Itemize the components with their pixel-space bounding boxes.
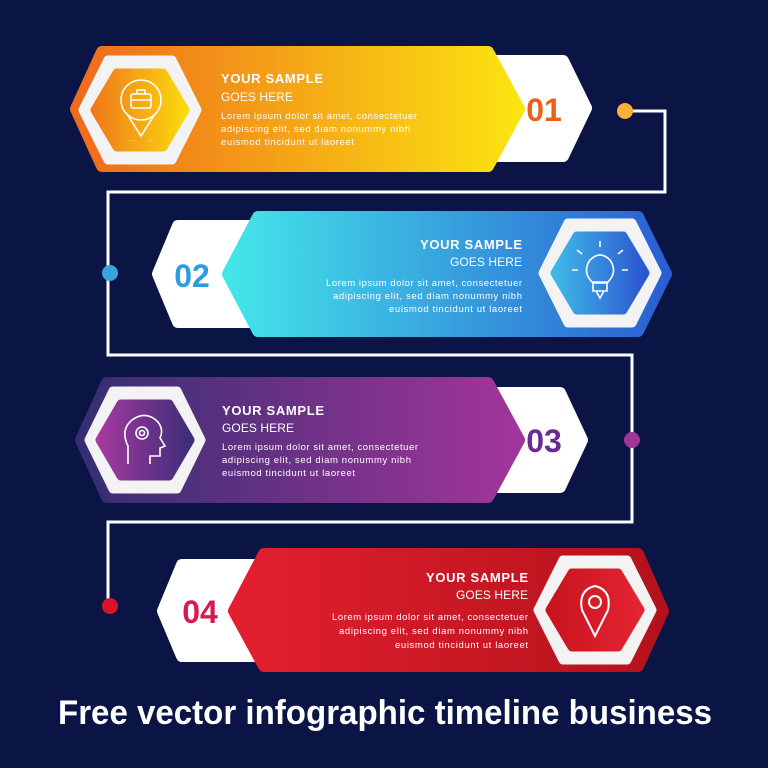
icon: location pin <box>538 560 652 660</box>
text block 02: Lorem ipsum dolor sit amet, consectetuer <box>326 278 522 289</box>
number tag 04 <box>163 565 272 656</box>
text block 02: GOES HERE <box>450 255 522 269</box>
icon: briefcase pin <box>83 60 197 160</box>
text block 01: GOES HERE <box>221 90 293 104</box>
text block 04: Lorem ipsum dolor sit amet, consectetuer <box>332 612 528 623</box>
panel: step 04 <box>163 554 663 666</box>
text block 04: YOUR SAMPLE <box>426 570 528 585</box>
text block 03: GOES HERE <box>222 421 294 435</box>
text block 04: euismod tincidunt ut laoreet <box>395 640 528 651</box>
panel: step 03 <box>81 383 582 497</box>
dot: 04 <box>102 598 118 614</box>
text block 04 <box>332 570 528 651</box>
text block 01 <box>221 71 417 148</box>
text block 03 <box>222 403 418 479</box>
number tag 03: 03 <box>526 423 562 459</box>
text block 02: euismod tincidunt ut laoreet <box>389 304 522 315</box>
number tag 01: 01 <box>526 92 562 128</box>
caption: Free vector infographic timeline business <box>58 694 712 732</box>
text block 04: adipiscing elit, sed diam nonummy nibh <box>339 626 528 637</box>
text block 04: GOES HERE <box>456 588 528 602</box>
text block 02: YOUR SAMPLE <box>420 237 522 252</box>
icon: light bulb <box>543 223 657 323</box>
number tag 02: 02 <box>174 258 210 294</box>
text block 01: YOUR SAMPLE <box>221 71 323 86</box>
text block 02: adipiscing elit, sed diam nonummy nibh <box>333 291 522 302</box>
dot: 02 <box>102 265 118 281</box>
text block 03: Lorem ipsum dolor sit amet, consectetuer <box>222 442 418 453</box>
timeline connector <box>108 111 665 606</box>
text block 03: YOUR SAMPLE <box>222 403 324 418</box>
text block 03: adipiscing elit, sed diam nonummy nibh <box>222 455 411 466</box>
number tag 03 <box>470 393 582 487</box>
icon: briefcase pin: ... <box>148 134 155 143</box>
panel: step 01 <box>76 52 586 166</box>
icon: head with gear <box>89 391 201 489</box>
text block 02 <box>326 237 522 315</box>
dot: 03 <box>624 432 640 448</box>
icon: briefcase pin: ... <box>128 134 135 143</box>
text block 01: adipiscing elit, sed diam nonummy nibh <box>221 124 410 135</box>
number tag 02 <box>158 226 270 322</box>
text block 03: euismod tincidunt ut laoreet <box>222 468 355 479</box>
text block 01: Lorem ipsum dolor sit amet, consectetuer <box>221 111 417 122</box>
number tag 01 <box>470 61 586 156</box>
text block 01: euismod tincidunt ut laoreet <box>221 137 354 148</box>
panel: step 02 <box>158 217 666 331</box>
dot: 01 <box>617 103 633 119</box>
number tag 04: 04 <box>182 594 218 630</box>
